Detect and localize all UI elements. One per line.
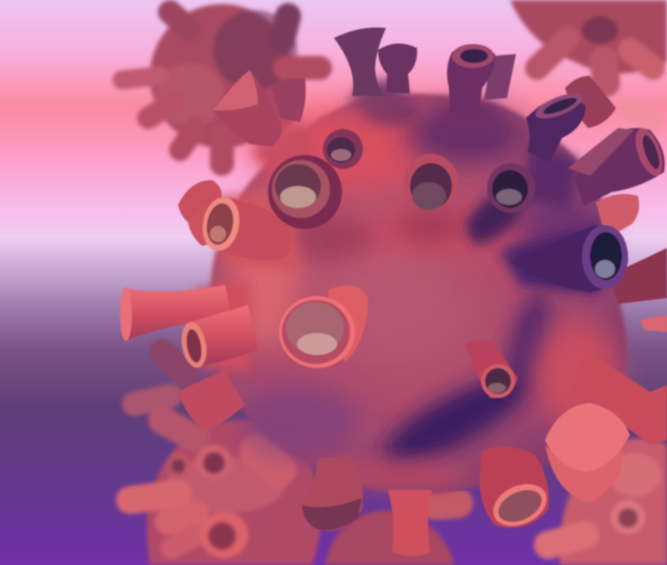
spike: top tall purple cup — [447, 44, 495, 122]
spike: centre cup — [404, 154, 458, 210]
spike: right lower large stem — [570, 350, 667, 445]
spike: bottom short cup — [302, 456, 363, 531]
spike bases — [195, 79, 600, 370]
background virus: lower right — [548, 438, 667, 565]
spikes group — [120, 27, 667, 556]
shading: body highlights and shadows — [230, 98, 620, 489]
spike: left lower stem — [178, 370, 245, 432]
background virus: lower left — [130, 352, 321, 565]
spike: dark rimmed cup upper centre — [268, 155, 342, 229]
spike: large front cup — [279, 286, 368, 368]
spike: top purple — [378, 43, 417, 94]
main virus body — [120, 27, 667, 556]
spike: left long stem — [120, 285, 232, 341]
spike: right upper cup — [526, 88, 586, 162]
spike: small upper centre — [323, 129, 363, 169]
spike: centre right dark cup — [487, 163, 535, 213]
spike: upper left funnel — [213, 70, 282, 146]
background virus: top right — [510, 0, 667, 120]
spike: left medium stem — [178, 305, 258, 370]
spike: left small back — [178, 180, 225, 246]
spike: right mid pink — [596, 194, 639, 232]
spike: bottom stem — [388, 490, 432, 556]
spike: bottom right cup — [480, 447, 553, 534]
spike: top small behind funnel — [271, 78, 306, 122]
spike: lower right pink lobes — [545, 403, 630, 503]
spike: far right stem — [610, 248, 667, 304]
spike: left upper cup — [199, 194, 292, 260]
spike: right big purple cup — [568, 125, 667, 206]
background virus: top — [122, 4, 320, 164]
body sphere — [209, 94, 627, 494]
spike: right big dark cup — [510, 225, 628, 292]
spike: small lower right cup — [465, 340, 518, 398]
spike: top right behind — [484, 54, 516, 100]
spike: right far upper — [565, 76, 616, 128]
background virus: lower centre — [325, 503, 458, 565]
spike: top dark funnel — [334, 27, 386, 96]
